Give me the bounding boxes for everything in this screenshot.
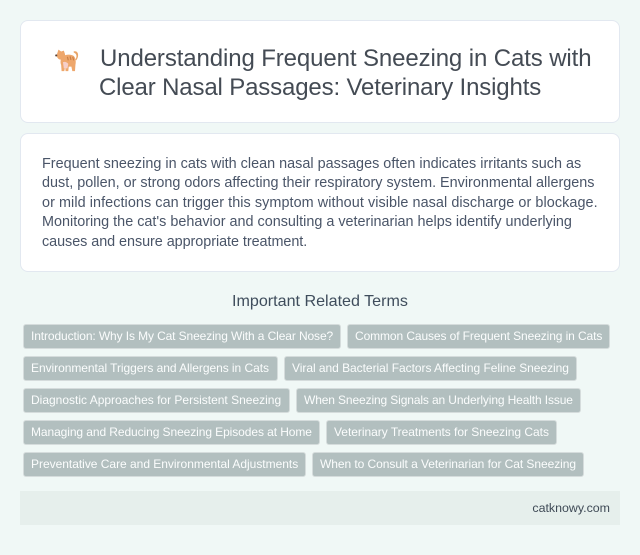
- title: Clear Nasal Passages: Veterinary Insights: [99, 74, 541, 101]
- tag: [23, 324, 341, 349]
- tag: Environmental Triggers and Allergens in Cats: [31, 361, 269, 375]
- tag: Viral and Bacterial Factors Affecting Feline Sneezing: [292, 361, 569, 375]
- title: [99, 45, 591, 101]
- icon: cat: [55, 50, 78, 72]
- summary text: Frequent sneezing in cats with clean nasal passages often indicates irritants such as: [42, 156, 581, 172]
- tag: Veterinary Treatments for Sneezing Cats: [334, 425, 549, 439]
- tag: [284, 356, 577, 381]
- tag: When to Consult a Veterinarian for Cat Sneezing: [320, 457, 576, 471]
- tag: [23, 356, 278, 381]
- summary text: [42, 156, 598, 250]
- tag: [312, 452, 584, 477]
- tag: [23, 420, 320, 445]
- footer bar: [20, 491, 620, 525]
- panel: title card: [20, 20, 620, 123]
- tag: Preventative Care and Environmental Adjustments: [31, 457, 298, 471]
- summary text: or mild infections can trigger this symptom without visible nasal discharge or blockage.: [42, 194, 598, 210]
- tag: When Sneezing Signals an Underlying Health Issue: [304, 393, 573, 407]
- heading: related terms: Important Related Terms: [232, 292, 408, 310]
- tag: Common Causes of Frequent Sneezing in Cats: [355, 329, 602, 343]
- tag: Managing and Reducing Sneezing Episodes at Home: [31, 425, 312, 439]
- footer source: catknowy.com: [532, 501, 610, 515]
- tag: Diagnostic Approaches for Persistent Sneezing: [31, 393, 281, 407]
- summary text: causes and ensure appropriate treatment.: [42, 234, 307, 250]
- summary text: dust, pollen, or strong odors affecting their respiratory system. Environmental allergens: [42, 175, 594, 191]
- tag: [23, 388, 290, 413]
- tag list: [23, 324, 610, 477]
- summary text: Monitoring the cat's behavior and consulting a veterinarian helps identify underlying: [42, 214, 572, 230]
- tag: [296, 388, 581, 413]
- panel: summary card: [20, 133, 620, 272]
- tag: Introduction: Why Is My Cat Sneezing With a Clear Nose?: [31, 329, 333, 343]
- tag: [23, 452, 306, 477]
- title: Understanding Frequent Sneezing in Cats with: [100, 45, 591, 72]
- tag: [326, 420, 557, 445]
- tag: [347, 324, 610, 349]
